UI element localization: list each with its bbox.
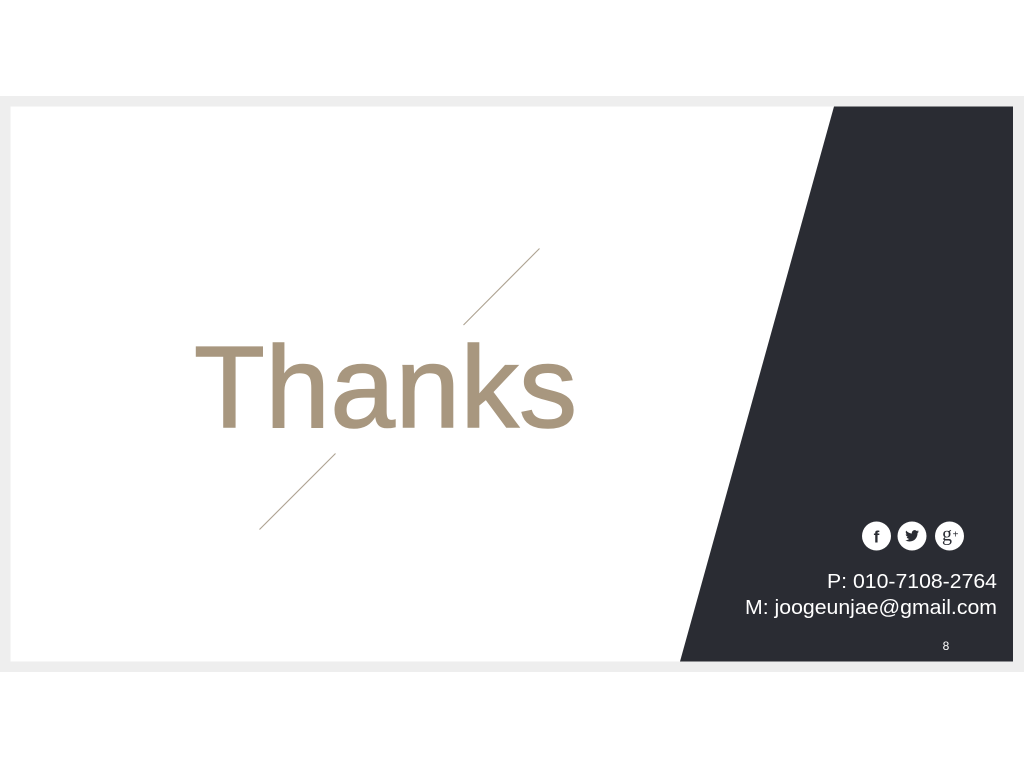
icon: google plus bbox=[935, 522, 964, 550]
icon: google plus: g bbox=[942, 524, 952, 546]
slide frame bbox=[0, 96, 1024, 672]
page number: 8 bbox=[943, 639, 950, 653]
slide panel bbox=[10, 106, 1013, 662]
panel: dark diagonal bbox=[680, 106, 1013, 662]
lower accent line bbox=[260, 454, 336, 530]
phone number: P: 010-7108-2764 bbox=[827, 570, 997, 593]
icon: google plus: + bbox=[953, 530, 959, 540]
title: Thanks bbox=[194, 322, 577, 452]
upper accent line bbox=[464, 248, 540, 325]
icon: facebook: f bbox=[874, 528, 880, 546]
icon: facebook bbox=[862, 522, 891, 550]
icon: twitter bbox=[898, 522, 926, 550]
email address: M: joogeunjae@gmail.com bbox=[745, 596, 997, 619]
